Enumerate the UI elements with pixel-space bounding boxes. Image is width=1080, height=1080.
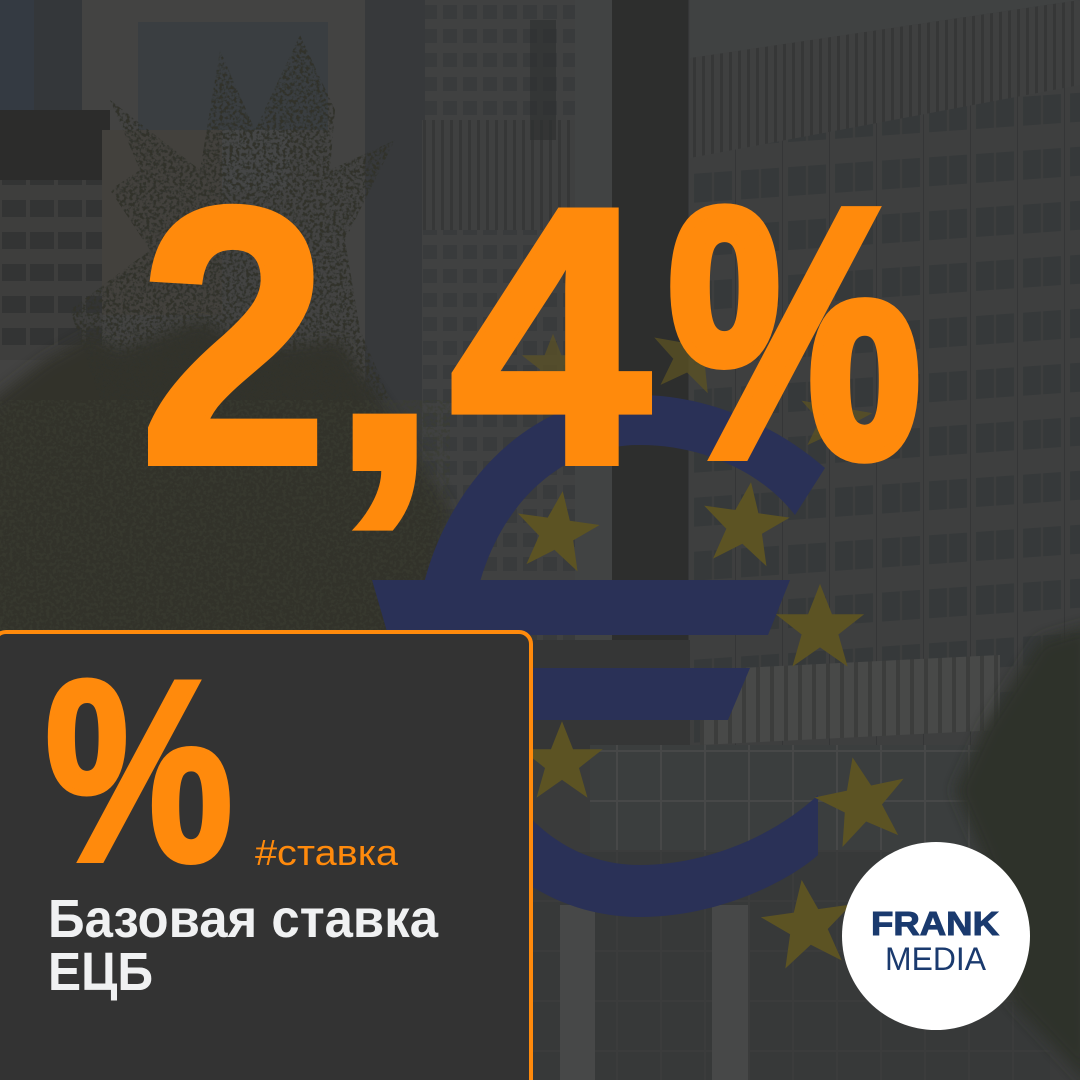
logo: Frank Media: FRANK: [871, 905, 999, 942]
lower facade: [530, 640, 1050, 1080]
icon: percent sign: %: [45, 626, 233, 915]
panel heading: ЕЦБ: [48, 942, 153, 1002]
right tower: [688, 0, 1080, 760]
logo: Frank Media: [842, 842, 1030, 1030]
euro stars: [511, 312, 915, 971]
main figure: 2,4%: %: [668, 135, 921, 530]
main figure: 2,4%: 2: [139, 131, 328, 541]
central tower: [422, 0, 688, 750]
logo: Frank Media: MEDIA: [885, 941, 987, 977]
main figure: 2,4%: ,: [321, 122, 447, 553]
main figure: 2,4%: 4: [449, 131, 653, 541]
main figure: 2,4%: [139, 122, 921, 553]
euro symbol: [372, 395, 825, 917]
hashtag: #ставка: [255, 832, 399, 873]
info panel: [0, 626, 531, 1080]
left buildings: [0, 0, 425, 405]
panel heading: [48, 889, 439, 1002]
panel heading: Базовая ставка: [48, 889, 439, 949]
